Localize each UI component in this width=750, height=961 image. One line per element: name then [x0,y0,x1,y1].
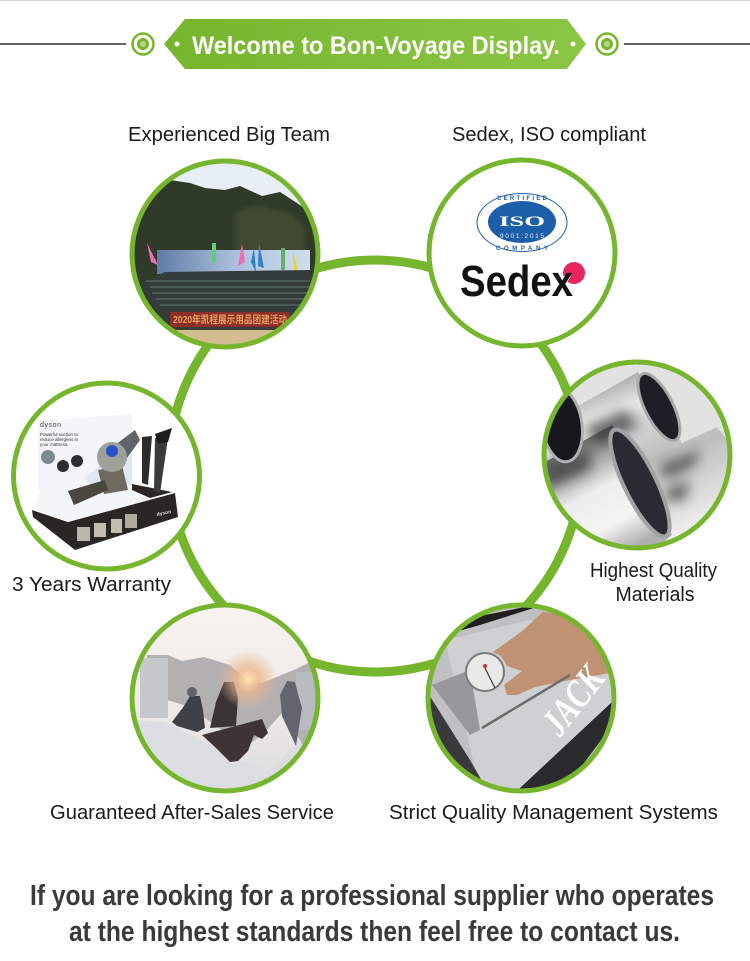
panel: handshake [130,603,322,795]
header [0,19,750,69]
tools [142,436,152,485]
flags [147,243,158,265]
icon: ISO badge: ISO [499,214,545,230]
icon: ISO badge: COMPANY [496,246,548,252]
crowd [138,270,316,322]
label: quality systems: Strict Quality Management Systems [389,802,718,824]
title banner: Welcome to Bon-Voyage Display. [192,32,560,60]
left ring bullet [132,34,154,54]
label: warranty: 3 Years Warranty [12,574,171,596]
top edge strip [0,0,750,1]
trees [130,180,320,332]
big connecting ring [169,260,581,672]
label: after-sales: Guaranteed After-Sales Service [50,802,334,824]
gauge [466,653,504,691]
title banner [164,19,586,69]
label: materials: Materials [616,584,694,606]
panel: display stand: Powerful suction to [40,432,79,437]
office glass panels [140,658,168,718]
panel: display stand: your mattress. [40,442,69,447]
left header line [0,43,126,45]
pipe shading [545,410,700,502]
ground [176,330,274,344]
hand [493,612,610,695]
panel: display stand: dyson [156,509,172,518]
business people and hands [172,696,205,732]
tiles [77,527,90,541]
panel: certifications [429,160,615,346]
panel: team photo [130,159,320,353]
icon: ISO badge: 9001:2015 [500,233,544,240]
panel: display stand: dyson [40,422,61,429]
right ring bullet [596,34,618,54]
backdrop [157,250,310,274]
closing statement [30,880,714,948]
panel: metal pipes [537,360,735,560]
icon: ISO badge [477,194,567,252]
back board [38,414,132,490]
vacuum [68,430,140,505]
label: materials [590,560,717,606]
panel: display stand: reduce allergens in [40,437,79,442]
label: materials: Highest Quality [590,560,717,582]
icon: Sedex logo: Sedex [460,257,573,306]
panel: quality gauge [426,603,620,795]
red banner: 2020年凯程展示用品团建活动 [173,313,287,326]
panel: display stand [12,381,202,571]
label: team: Experienced Big Team [128,124,330,146]
red banner [170,312,290,327]
icon: ISO badge: CERTIFIED [497,196,548,202]
stand base [32,493,178,550]
right header line [624,43,750,45]
JACK lettering: JACK [532,656,615,744]
label: compliance: Sedex, ISO compliant [452,124,646,146]
